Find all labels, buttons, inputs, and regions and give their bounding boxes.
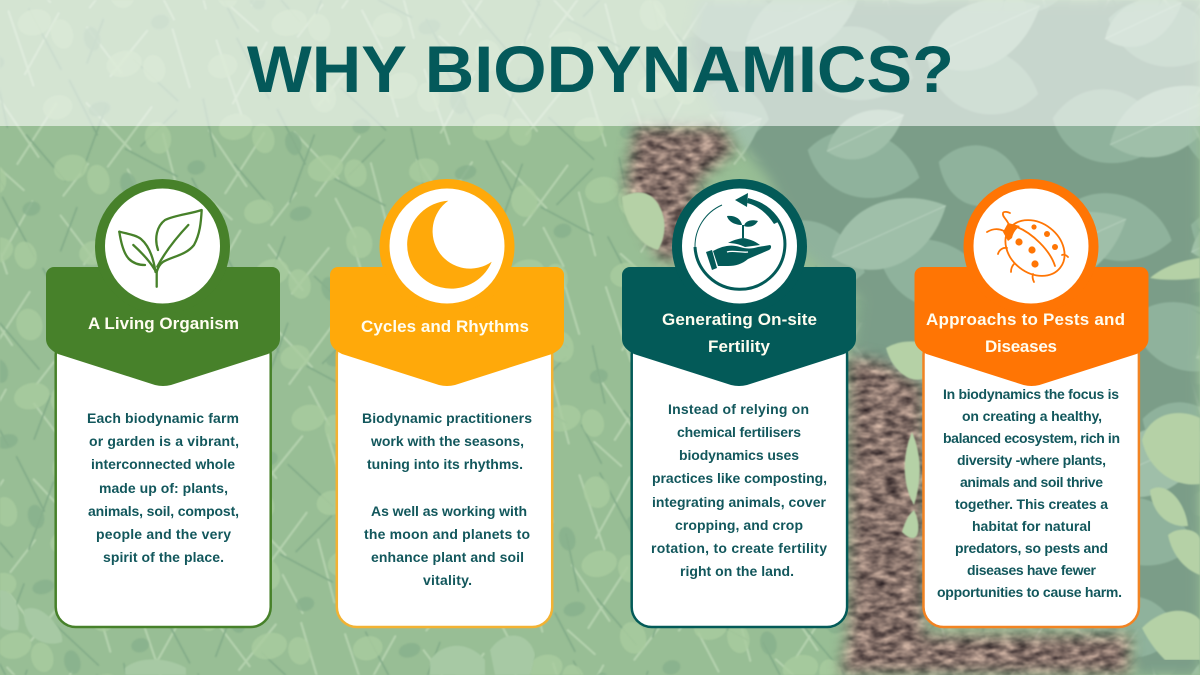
heading	[926, 310, 1125, 356]
text block: the moon and planets to	[364, 526, 530, 542]
heading: Cycles and Rhythms	[361, 317, 529, 336]
text block: made up of: plants,	[99, 480, 228, 496]
text block: practices like composting,	[652, 470, 827, 486]
text block: In biodynamics the focus is	[943, 386, 1119, 402]
text block	[651, 401, 827, 579]
heading: Approachs to Pests and	[926, 310, 1125, 329]
text block: people and the very	[96, 526, 231, 542]
text block: right on the land.	[680, 563, 794, 579]
text block: diseases have fewer	[967, 562, 1097, 578]
text block: Each biodynamic farm	[87, 410, 239, 426]
text block: Biodynamic practitioners	[362, 410, 532, 426]
text block: opportunities to cause harm.	[937, 584, 1122, 600]
text block: work with the seasons,	[370, 433, 524, 449]
accent leaves	[622, 192, 1200, 660]
leaf texture	[692, 0, 1200, 675]
icon: crescent moon	[390, 188, 504, 304]
text block: chemical fertilisers	[677, 424, 801, 440]
heading: Fertility	[708, 337, 771, 356]
translucent title band	[0, 0, 1200, 126]
card body	[632, 335, 847, 627]
icon: hand holding seedling with circular arrow	[682, 188, 797, 304]
heading	[662, 310, 817, 356]
text block: spirit of the place.	[103, 549, 224, 565]
card body	[337, 335, 552, 627]
icon badge	[672, 179, 807, 314]
text block: balanced ecosystem, rich in	[943, 430, 1120, 446]
text block	[362, 410, 532, 588]
text block: or garden is a vibrant,	[89, 433, 239, 449]
text block: animals and soil thrive	[960, 474, 1103, 490]
banner	[622, 267, 856, 386]
text block: tuning into its rhythms.	[367, 456, 523, 472]
icon badge	[380, 179, 514, 314]
text block	[937, 386, 1122, 600]
icon: sprout	[105, 188, 220, 304]
text block: cropping, and crop	[675, 517, 803, 533]
title: WHY BIODYNAMICS?	[247, 32, 954, 106]
icon badge	[95, 179, 230, 314]
text block	[87, 410, 239, 565]
card body	[56, 335, 271, 627]
text block: diversity -where plants,	[957, 452, 1106, 468]
text block: predators, so pests and	[955, 540, 1108, 556]
text block: vitality.	[423, 572, 472, 588]
heading: Generating On-site	[662, 310, 817, 329]
panel: generating on-site fertility	[622, 179, 856, 627]
text block: enhance plant and soil	[371, 549, 524, 565]
banner	[914, 267, 1148, 386]
text block: on creating a healthy,	[962, 408, 1102, 424]
icon badge	[964, 179, 1098, 314]
icon: ladybug	[974, 188, 1088, 304]
heading: Diseases	[985, 337, 1057, 356]
banner	[330, 267, 564, 386]
text block: integrating animals, cover	[652, 494, 827, 510]
text block: habitat for natural	[972, 518, 1091, 534]
text block: animals, soil, compost,	[88, 503, 239, 519]
mulch patches	[625, 126, 1130, 675]
text block: Instead of relying on	[668, 401, 809, 417]
heading: A Living Organism	[88, 314, 239, 333]
panel: approaches to pests and diseases	[914, 179, 1148, 627]
text block: biodynamics uses	[679, 447, 799, 463]
banner	[46, 267, 280, 386]
text block: interconnected whole	[91, 456, 235, 472]
text block: As well as working with	[371, 503, 527, 519]
text block: rotation, to create fertility	[651, 540, 827, 556]
panel: cycles and rhythms	[330, 179, 564, 627]
card body	[924, 335, 1139, 627]
panel: a living organism	[46, 179, 280, 627]
text block: together. This creates a	[955, 496, 1108, 512]
